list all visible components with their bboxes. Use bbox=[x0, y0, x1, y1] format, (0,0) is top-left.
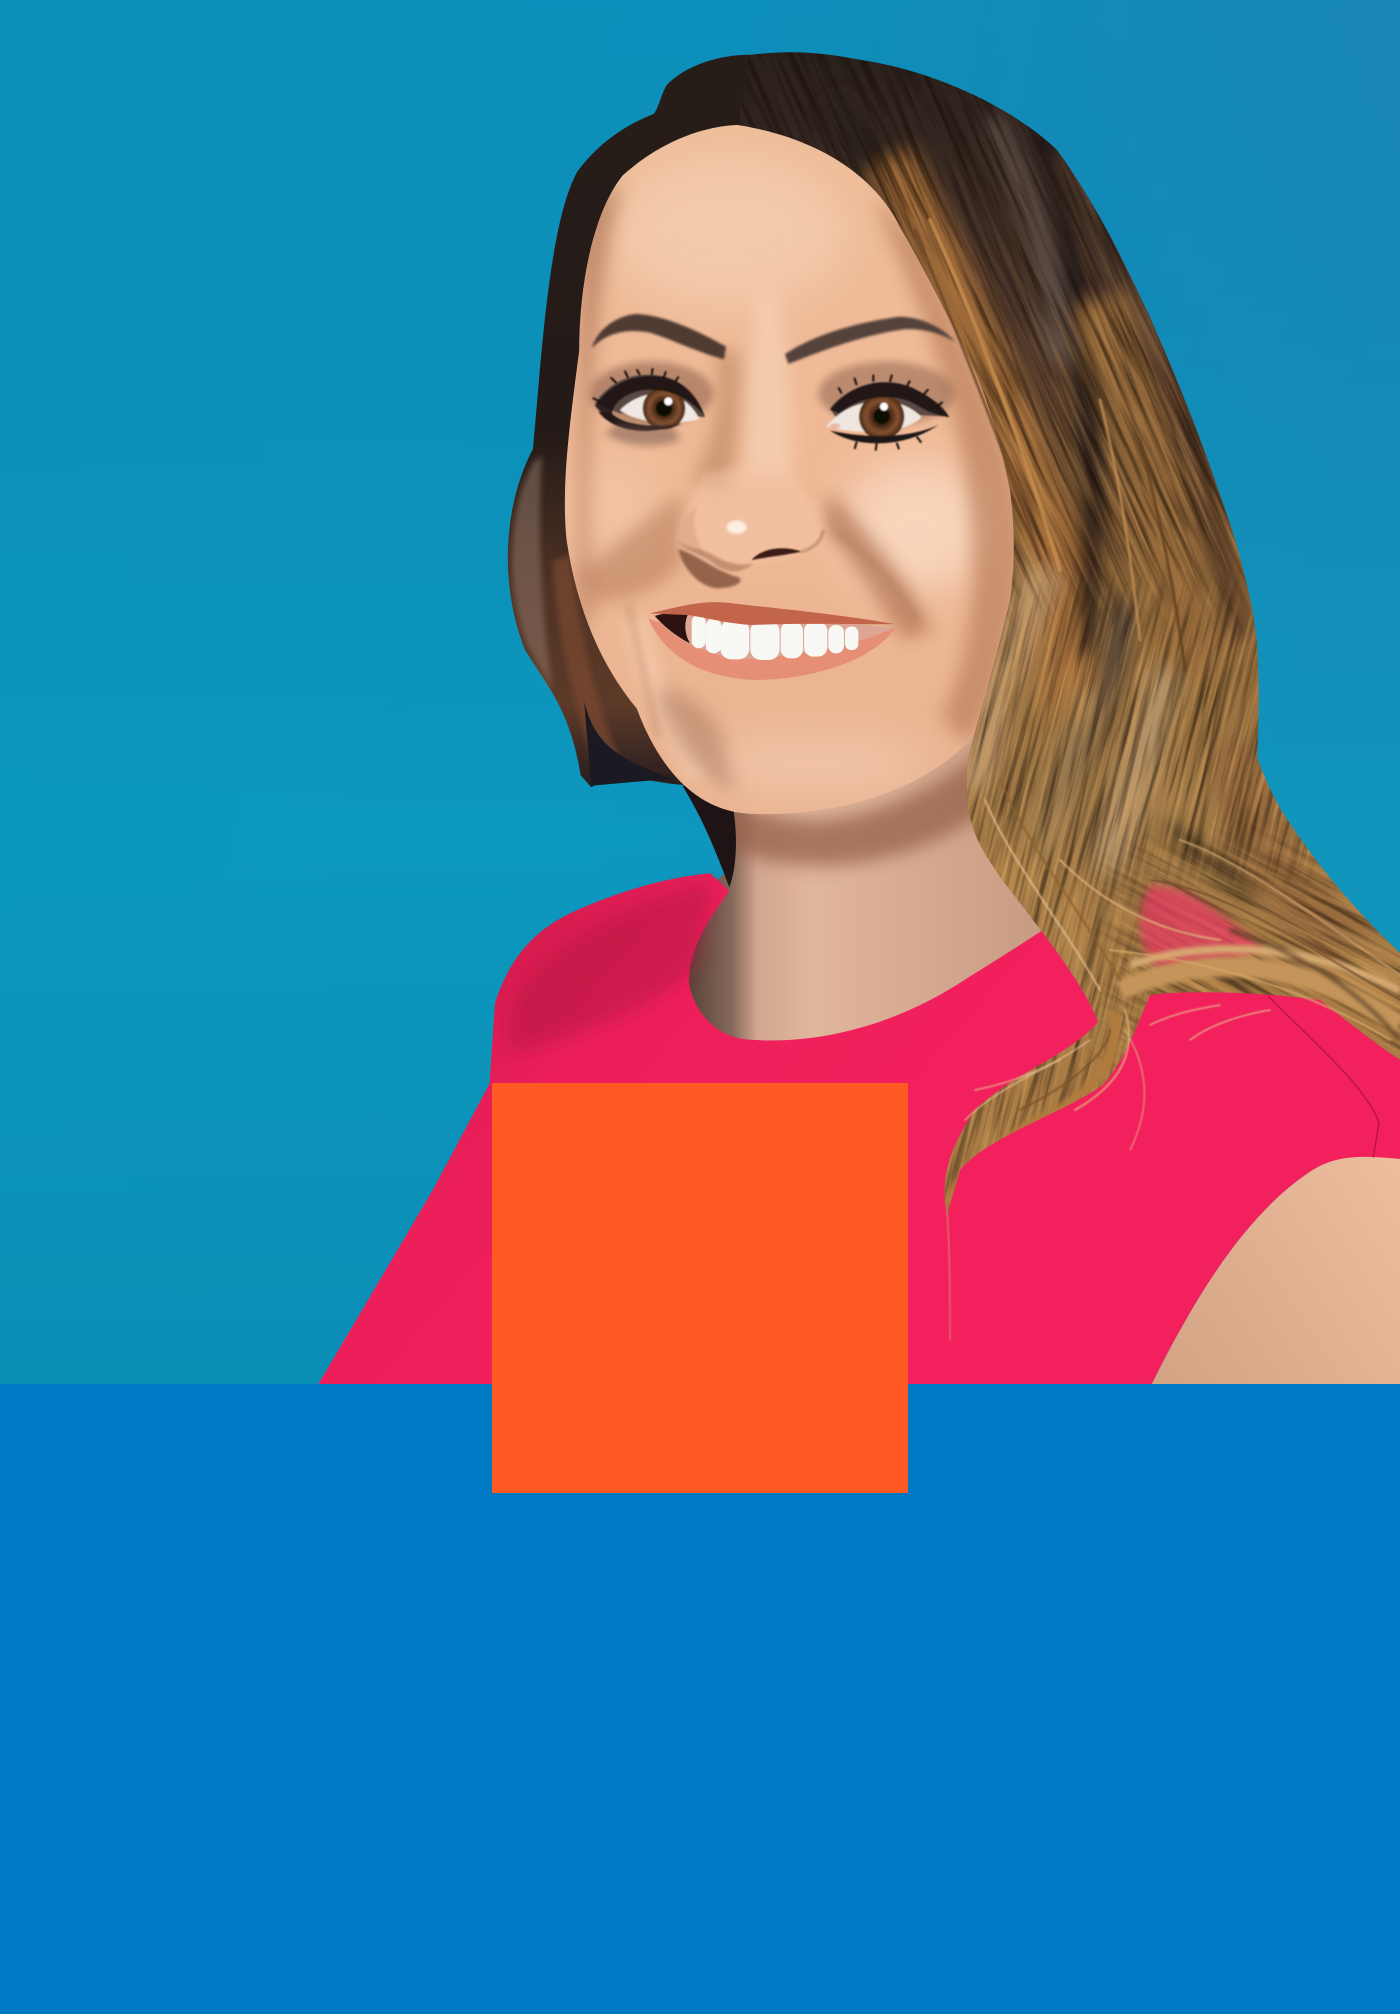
eye shadow left bbox=[590, 362, 713, 425]
right eyebrow bbox=[785, 317, 955, 364]
dark hair tips left bbox=[584, 702, 672, 786]
photo background bbox=[0, 0, 1400, 1384]
face shading bbox=[574, 154, 1021, 796]
hair strand texture, upper bbox=[291, 0, 1400, 1011]
hair strand texture, sweep bbox=[506, 294, 1400, 1741]
fine hair strands bbox=[915, 220, 1400, 1340]
nose bbox=[677, 460, 824, 588]
pink top bbox=[318, 873, 1400, 1386]
mouth bbox=[648, 602, 895, 680]
body, left hair and face base bbox=[318, 55, 1400, 1386]
shoulder shadow on top bbox=[510, 880, 714, 1052]
woman portrait bbox=[318, 52, 1400, 1384]
left eye bbox=[593, 368, 705, 431]
left under-eye shadow bbox=[605, 423, 680, 446]
right eye bbox=[827, 375, 949, 451]
neck shading bbox=[734, 750, 973, 876]
left hair bbox=[508, 54, 750, 788]
facial features bbox=[590, 314, 955, 737]
teeth bbox=[692, 615, 858, 660]
right hair mass bbox=[291, 0, 1400, 1741]
pink top seen through hair bbox=[1140, 885, 1265, 975]
dark hair strand at neck bbox=[682, 786, 736, 887]
orange square bbox=[492, 1083, 908, 1493]
hair tonal bands bbox=[291, 0, 1400, 1741]
smile creases bbox=[628, 530, 917, 737]
hair strand texture, middle bbox=[446, 194, 1400, 1576]
neck bbox=[689, 732, 1042, 1040]
portrait photo panel bbox=[0, 0, 1400, 1384]
left eyebrow bbox=[592, 314, 726, 359]
skin of the arm bbox=[1151, 1156, 1400, 1386]
frizzy hair highlight left bbox=[512, 456, 553, 691]
eye shadow right bbox=[818, 362, 955, 425]
face bbox=[565, 125, 1021, 814]
hair highlights, upper bbox=[291, 0, 1400, 1011]
sleeve seam bbox=[1268, 996, 1379, 1158]
reddish hair tone left bbox=[553, 554, 619, 765]
